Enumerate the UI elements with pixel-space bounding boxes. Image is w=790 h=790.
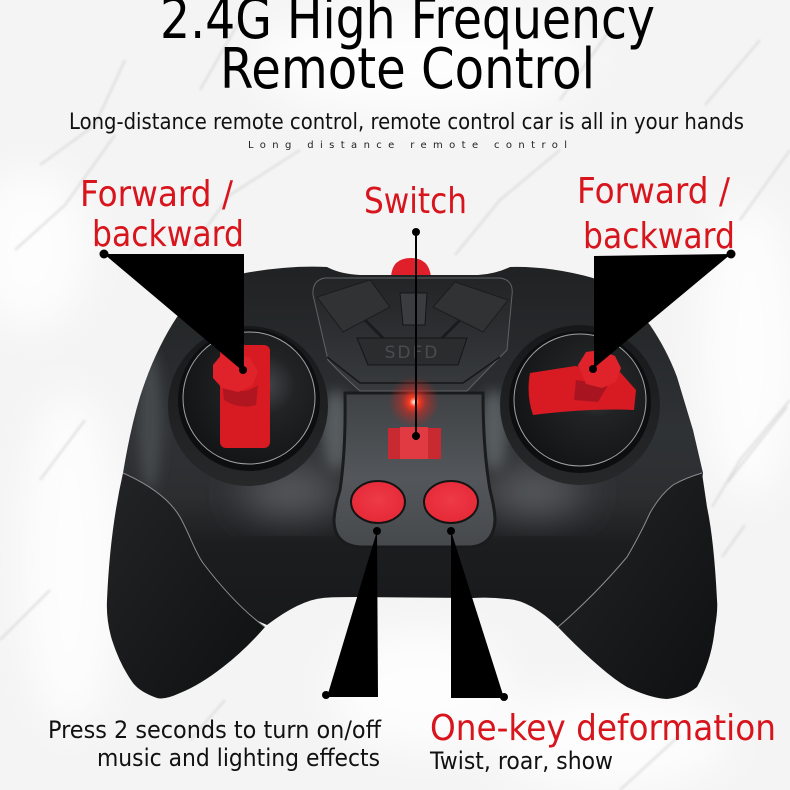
label: left forward/backward: Forward / — [80, 174, 234, 215]
left grip — [107, 473, 265, 698]
power switch — [388, 427, 441, 459]
spaced caption: Long distance remote control — [248, 140, 567, 151]
callout: left forward/backward pointer — [100, 250, 247, 374]
power LED — [388, 376, 440, 428]
title: Remote Control — [220, 37, 595, 102]
right red button — [424, 481, 478, 523]
lower button panel — [334, 393, 495, 547]
label: music and lighting — [48, 716, 381, 772]
callout: deformation button pointer — [447, 527, 508, 701]
label: music and lighting: Press 2 seconds to turn on/off — [48, 716, 381, 744]
label: twist roar show: Twist, roar, show — [429, 747, 613, 775]
label: left forward/backward: backward — [92, 214, 244, 255]
controller body — [123, 266, 703, 627]
top badge panel with flags — [313, 278, 512, 391]
title — [160, 0, 655, 102]
callout: switch pointer — [412, 228, 420, 440]
label: right forward/backward — [577, 171, 735, 257]
label: right forward/backward: Forward / — [577, 171, 731, 212]
callout: right forward/backward pointer — [589, 250, 736, 373]
top badge panel with flags: SDFD — [385, 343, 439, 363]
right grip — [558, 473, 717, 699]
label: right forward/backward: backward — [583, 216, 735, 257]
right joystick — [500, 325, 660, 485]
label: music and lighting: music and lighting effects — [97, 744, 380, 772]
label: left forward/backward — [80, 174, 244, 255]
left joystick — [168, 326, 328, 486]
label: switch: Switch — [364, 181, 467, 222]
red top antenna — [391, 258, 431, 277]
callout: music button pointer — [322, 527, 381, 699]
left red button — [351, 481, 405, 523]
controller — [100, 258, 730, 699]
